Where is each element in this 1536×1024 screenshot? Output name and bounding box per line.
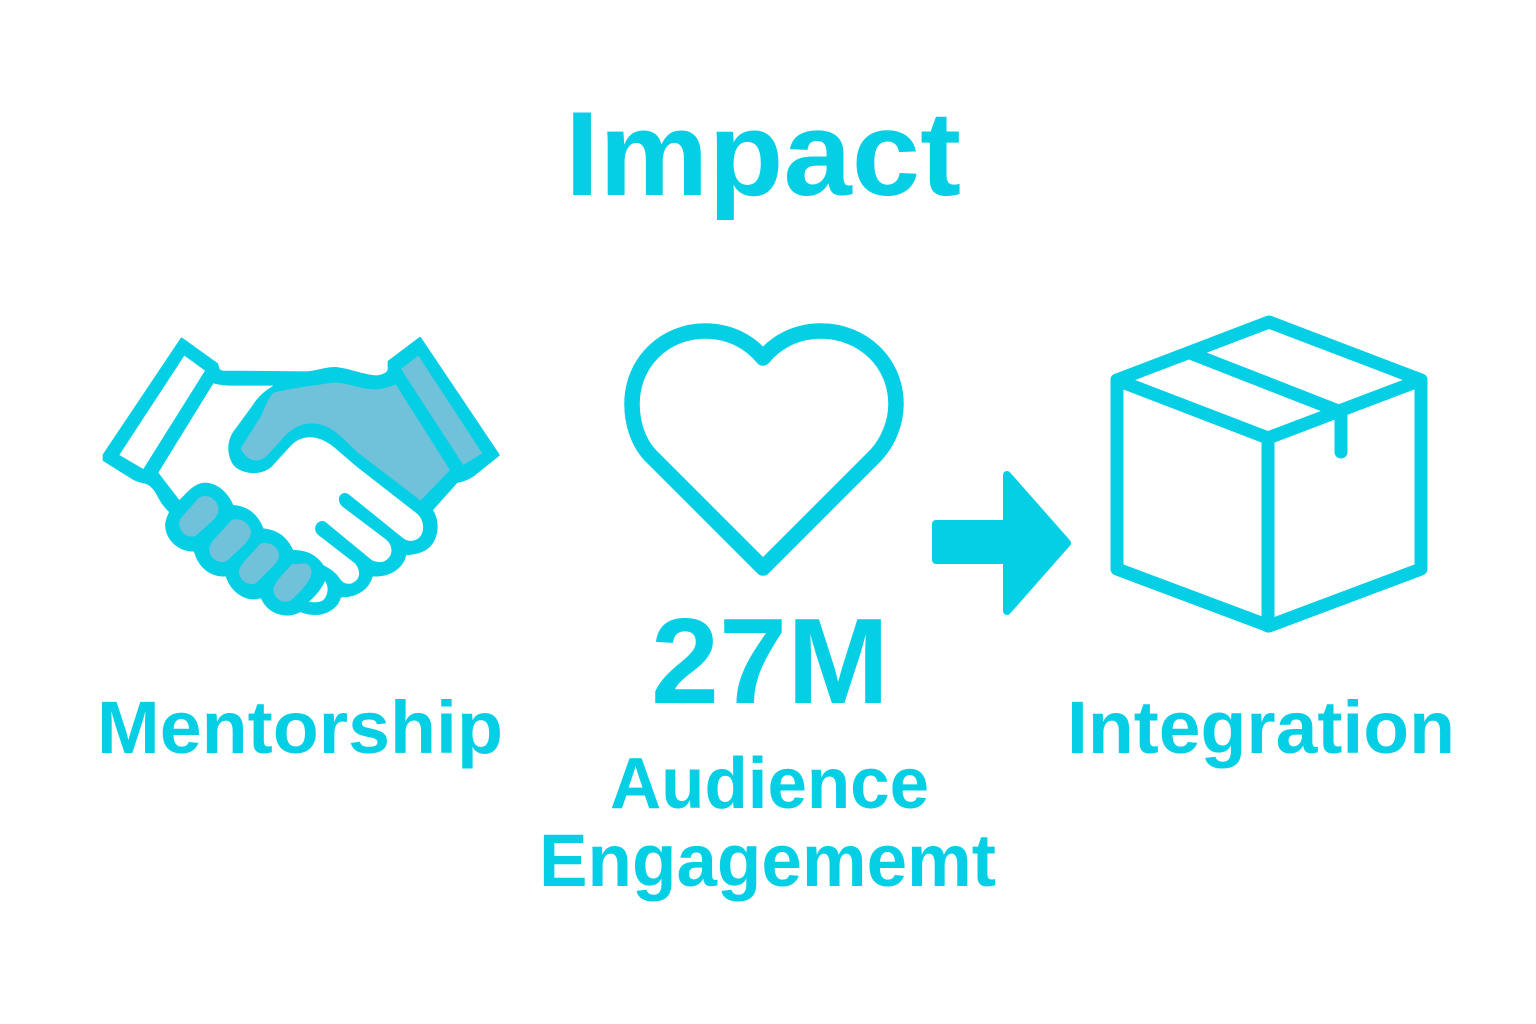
icon: box: [1117, 322, 1421, 626]
icon: heart: [632, 331, 896, 568]
label: mentorship: Mentorship: [97, 686, 503, 769]
label: integration: Integration: [1067, 686, 1455, 769]
title: Impact: [565, 87, 961, 221]
icon: handshake: [104, 338, 498, 614]
stat: 27M: 27M: [651, 593, 889, 729]
icon: arrow: [936, 475, 1067, 611]
label: audience engagement: Engagememt: [539, 819, 996, 902]
label: audience engagement: [539, 744, 996, 902]
label: audience engagement: Audience: [610, 744, 929, 824]
